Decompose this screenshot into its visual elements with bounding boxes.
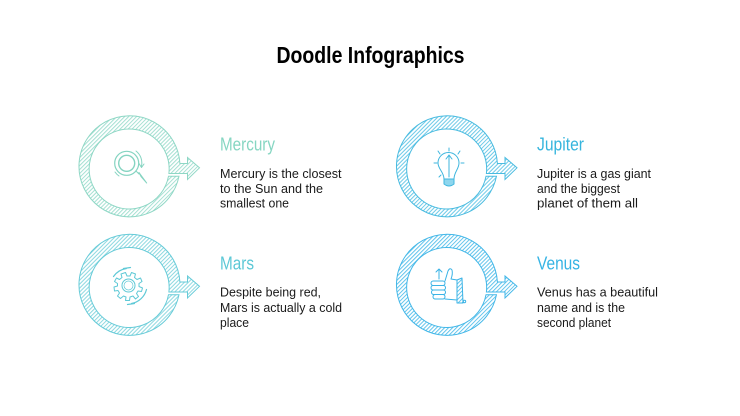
text: mercury description: Mercury is the closest	[220, 167, 342, 181]
panel: mercury	[79, 116, 342, 217]
icon: magnifying glass	[115, 151, 147, 183]
text: mercury description: to the Sun and the	[220, 182, 323, 196]
circular arrow: venus	[396, 234, 517, 335]
icon: gear	[114, 268, 146, 304]
text: jupiter description: and the biggest	[537, 182, 620, 196]
heading: venus: Venus	[537, 254, 580, 274]
text: venus description: Venus has a beautiful	[537, 286, 658, 300]
icon: thumbs up	[431, 269, 466, 303]
text: mars description: place	[220, 316, 249, 330]
text: venus description: name and is the	[537, 301, 625, 315]
panel: mars	[79, 234, 342, 335]
circular arrow: mars	[79, 234, 200, 335]
text: mercury description: smallest one	[220, 196, 289, 210]
icon: light bulb	[434, 148, 464, 186]
panel: venus	[396, 234, 658, 335]
text: venus description: second planet	[537, 316, 611, 330]
text: mars description: Despite being red,	[220, 286, 321, 300]
text: jupiter description	[537, 167, 652, 210]
circular arrow: mercury	[79, 116, 200, 217]
heading: jupiter: Jupiter	[537, 135, 584, 155]
circular arrow: jupiter	[396, 116, 517, 217]
text: venus description	[537, 286, 658, 330]
text: jupiter description: planet of them all	[537, 196, 638, 210]
text: jupiter description: Jupiter is a gas giant	[537, 167, 652, 181]
text: mercury description	[220, 167, 342, 210]
heading: mercury: Mercury	[220, 135, 275, 155]
panel: jupiter	[396, 116, 652, 217]
heading: mars: Mars	[220, 254, 254, 274]
text: mars description: Mars is actually a cold	[220, 301, 342, 315]
text: mars description	[220, 286, 342, 330]
title: Doodle Infographics	[276, 42, 464, 68]
